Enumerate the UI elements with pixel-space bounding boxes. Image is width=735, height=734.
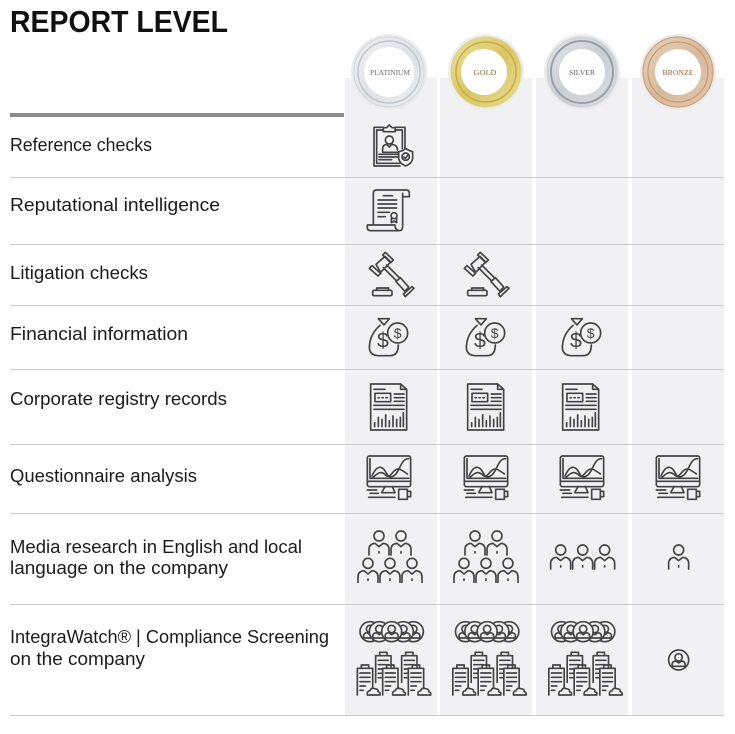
medal: gold — [448, 34, 524, 110]
row label: Questionnaire analysis: Questionnaire analysis — [10, 465, 197, 486]
icon: clipboard with shield — [374, 125, 413, 166]
icon: money bag gold — [466, 319, 505, 356]
row label: Corporate registry records: Corporate registry records — [10, 388, 227, 409]
icon: single profile bronze — [669, 650, 689, 670]
medal: silver: SILVER — [569, 68, 595, 77]
medal: bronze — [640, 34, 716, 110]
icon: certificate scroll — [367, 190, 409, 231]
icon: one person bronze — [669, 545, 689, 569]
medal: bronze: BRONZE — [662, 68, 694, 77]
icon: profiles and buildings platinum — [357, 622, 431, 695]
row label: Reference checks: Reference checks — [10, 134, 152, 155]
medal: platinum: PLATINIUM — [370, 68, 410, 77]
icon: document silver — [563, 384, 599, 430]
medal: gold: GOLD — [474, 68, 497, 77]
column backgrounds — [345, 78, 724, 715]
icon: monitor gold — [464, 456, 508, 499]
icon: five people platinum — [358, 531, 422, 582]
icon: three people silver — [551, 545, 615, 569]
icon: gavel gold — [464, 252, 509, 297]
icon: money bag platinum — [369, 319, 408, 356]
row label: Reputational intelligence: Reputational intelligence — [10, 194, 220, 215]
icon: document platinum — [371, 384, 407, 430]
medal: silver — [544, 34, 620, 110]
row label: Litigation checks: Litigation checks — [10, 262, 148, 283]
icon: five people gold — [454, 531, 518, 582]
medal: platinum — [351, 34, 427, 110]
icon: gavel platinum — [369, 252, 414, 297]
row label: IntegraWatch: on the company — [10, 648, 146, 669]
icon: profiles and buildings gold — [453, 622, 526, 695]
row label: Media research — [10, 536, 302, 578]
icon: document gold — [468, 384, 504, 430]
title: REPORT LEVEL — [10, 4, 228, 39]
row label: Media research: Media research in English and local — [10, 536, 302, 557]
icon: monitor silver — [560, 456, 604, 499]
icon: money bag silver — [562, 319, 601, 356]
row label: IntegraWatch: IntegraWatch® | Compliance Screening — [10, 626, 329, 647]
icon: monitor bronze — [656, 456, 700, 499]
row label: Media research: language on the company — [10, 557, 229, 578]
row label: IntegraWatch — [10, 626, 329, 669]
icon: monitor platinum — [367, 456, 411, 499]
icon: profiles and buildings silver — [549, 622, 622, 695]
row label: Financial information: Financial information — [10, 323, 188, 344]
